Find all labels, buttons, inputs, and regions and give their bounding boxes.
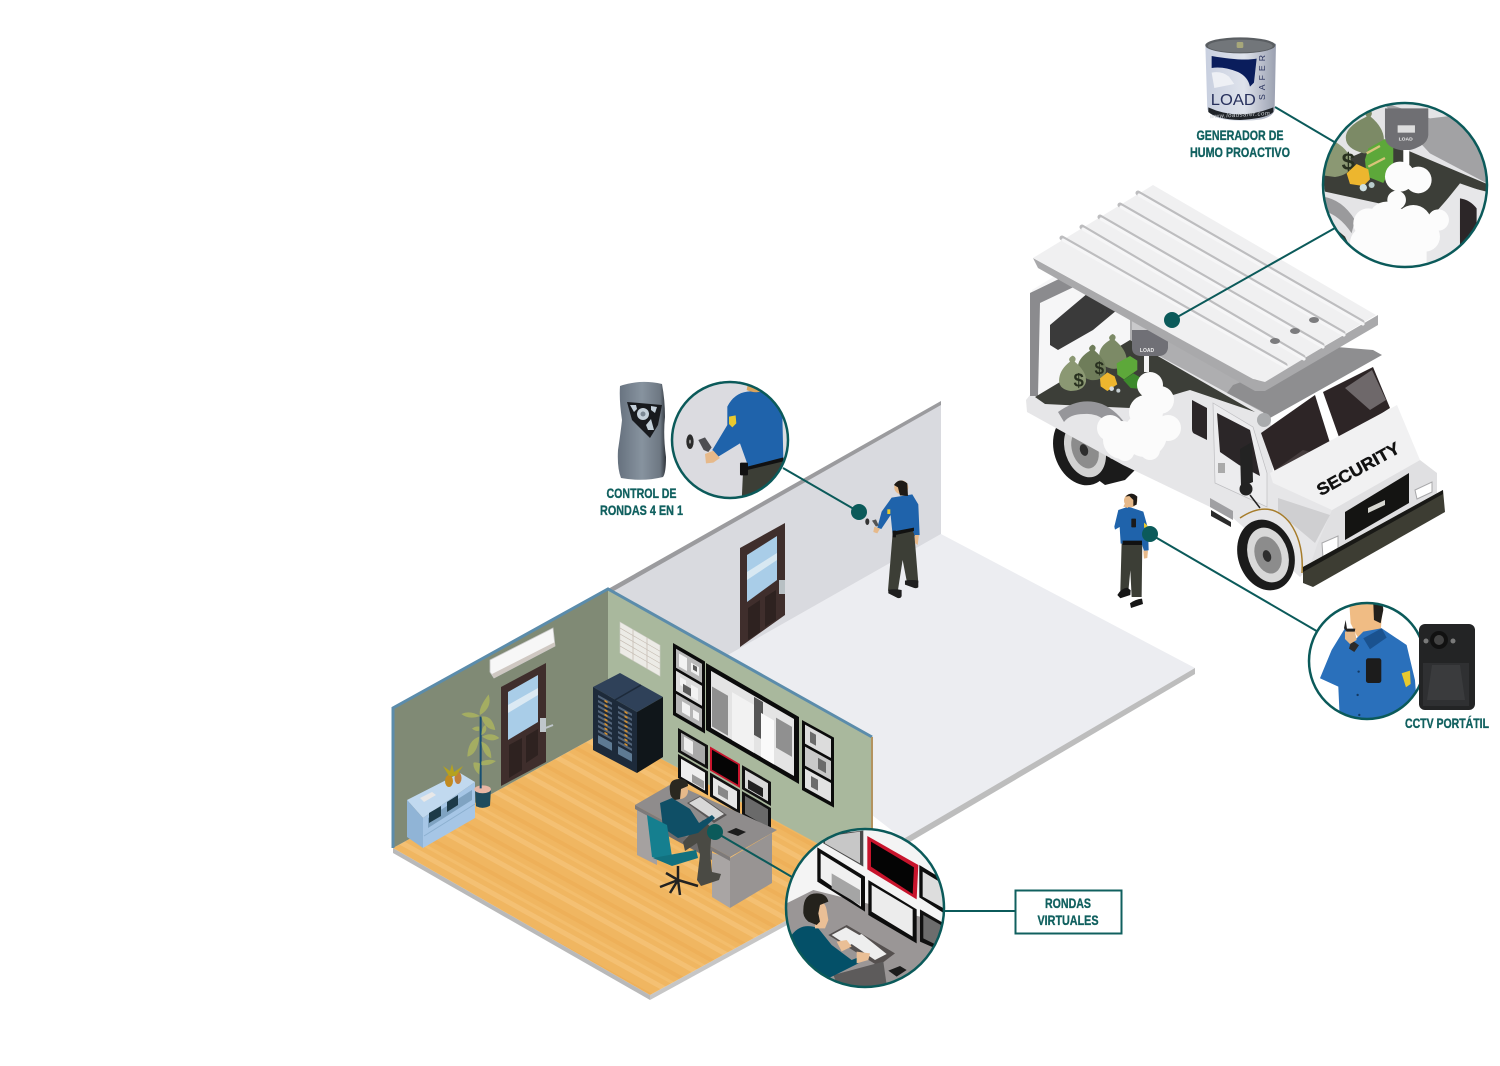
connector: smoke generator bbox=[1172, 107, 1336, 320]
callout circle: portable CCTV bbox=[1309, 602, 1425, 723]
connector: portable CCTV bbox=[1150, 534, 1320, 633]
smoke device: LOAD bbox=[1140, 348, 1154, 354]
door: corridor bbox=[740, 523, 785, 647]
video wall: lower monitors bbox=[678, 728, 771, 832]
label: smoke generator: GENERADOR DE bbox=[1196, 127, 1284, 143]
truck side body bbox=[1026, 280, 1332, 577]
money bags: $ bbox=[1095, 358, 1105, 378]
label box: virtual rounds bbox=[1016, 890, 1122, 934]
bumper bbox=[1303, 490, 1445, 587]
armored truck bbox=[1026, 185, 1445, 598]
label: guard round controller bbox=[600, 485, 683, 518]
headlights bbox=[1322, 482, 1432, 558]
callout circle: guard round bbox=[672, 382, 788, 502]
product: smoke generator can bbox=[1205, 37, 1276, 121]
label box: virtual rounds: RONDAS bbox=[1045, 895, 1091, 911]
shelf cabinet bbox=[407, 764, 475, 848]
plant bbox=[461, 694, 499, 808]
notice board bbox=[620, 622, 660, 676]
connector: guard round controller bbox=[783, 468, 859, 512]
smoke cloud bbox=[1097, 372, 1181, 461]
money bags: $ bbox=[1073, 370, 1084, 391]
hood lettering: SECURITY bbox=[1313, 438, 1404, 500]
server rack bbox=[593, 673, 663, 773]
front wheel bbox=[1228, 509, 1304, 598]
door: room bbox=[501, 663, 553, 786]
hood bbox=[1270, 405, 1420, 510]
outer floor slab bbox=[728, 534, 1195, 843]
back wall with door bbox=[608, 401, 941, 655]
callout circle: smoke generator: $ bbox=[1342, 148, 1355, 175]
product: smoke generator can: www.loadsafer.com bbox=[1210, 111, 1270, 120]
rear wheel bbox=[1044, 405, 1140, 493]
label: guard round controller: RONDAS 4 EN 1 bbox=[600, 502, 683, 518]
marker: truck roof bbox=[1164, 312, 1180, 328]
video wall: upper screens bbox=[673, 643, 834, 808]
cab door bbox=[1192, 400, 1267, 527]
room: floor and walls bbox=[393, 589, 873, 1000]
front fascia bbox=[1308, 460, 1437, 572]
product: portable CCTV camera bbox=[1419, 624, 1475, 710]
connector: virtual rounds bbox=[715, 832, 1015, 911]
money bags bbox=[1059, 334, 1141, 393]
callout circle: virtual rounds bbox=[784, 828, 946, 988]
rear side panel bbox=[1030, 276, 1130, 396]
label: smoke generator: HUMO PROACTIVO bbox=[1190, 144, 1290, 160]
label box: virtual rounds: VIRTUALES bbox=[1038, 912, 1098, 928]
smoke device bbox=[1132, 330, 1168, 372]
product: smoke generator can: LOAD bbox=[1211, 92, 1256, 109]
guard by truck bbox=[1114, 494, 1149, 608]
guard at wall bbox=[865, 480, 920, 598]
cargo interior bbox=[1035, 300, 1270, 412]
windshields bbox=[1261, 367, 1390, 472]
marker: virtual rounds bbox=[707, 824, 723, 840]
cab roof bbox=[1227, 347, 1382, 418]
callout circle: smoke generator: LOAD bbox=[1399, 137, 1413, 143]
marker: portable CCTV bbox=[1142, 526, 1158, 542]
product: guard round controller bbox=[618, 382, 666, 480]
wheel arch bbox=[1058, 401, 1128, 436]
product: smoke generator can: SAFER bbox=[1257, 55, 1267, 100]
air conditioner bbox=[490, 628, 555, 678]
callout circle: smoke generator bbox=[1318, 100, 1493, 273]
label: smoke generator bbox=[1190, 127, 1290, 160]
control desk bbox=[635, 783, 777, 908]
truck roof bbox=[1033, 185, 1378, 391]
label: guard round controller: CONTROL DE bbox=[606, 485, 676, 501]
operator and chair bbox=[647, 779, 721, 895]
grille bbox=[1345, 473, 1409, 540]
marker: guard round bbox=[851, 504, 867, 520]
